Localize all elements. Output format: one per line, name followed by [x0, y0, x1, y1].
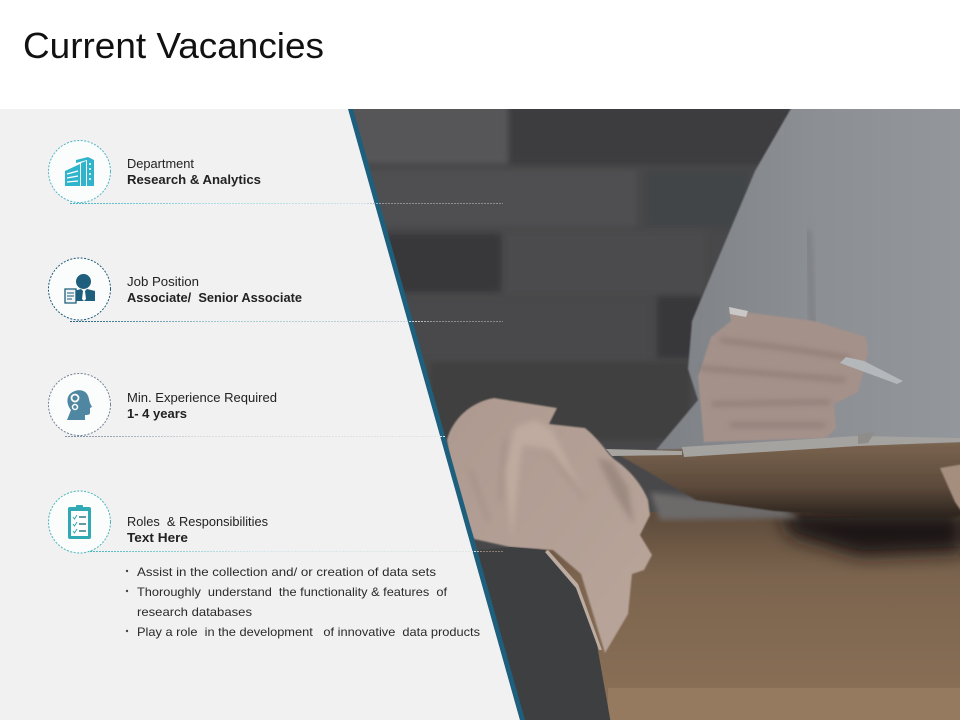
text: experience: Min. Experience Required	[127, 391, 277, 405]
clasped hands	[447, 398, 652, 653]
writing hand	[698, 307, 903, 442]
icon: job position person	[48, 258, 110, 320]
bullet list: responsibilities: Assist in the collection and/ or creation of data sets	[137, 565, 436, 579]
divider: department	[70, 202, 503, 204]
divider: job position	[70, 320, 503, 322]
table	[540, 512, 960, 720]
divider: experience	[65, 436, 445, 438]
text: job position: Associate/ Senior Associate	[127, 291, 302, 305]
panel: left background	[0, 109, 520, 720]
text: job position	[127, 275, 302, 305]
text: experience	[127, 391, 277, 421]
bullet list: responsibilities	[126, 565, 480, 639]
shirt	[656, 105, 960, 450]
icon: roles clipboard	[48, 491, 110, 553]
text: job position: Job Position	[127, 275, 199, 289]
panel edge stripe	[348, 109, 525, 720]
text: department	[127, 157, 261, 187]
text: roles: Text Here	[127, 531, 188, 545]
bullet list: responsibilities: Thoroughly understand the functionality & features of	[137, 585, 448, 599]
divider: roles	[90, 550, 503, 552]
text: department: Research & Analytics	[127, 173, 261, 187]
title: Current Vacancies	[23, 25, 324, 66]
bullet list: responsibilities: Play a role in the development of innovative data products	[137, 625, 480, 639]
photo: interview at a desk	[340, 105, 960, 720]
text: roles: Roles & Responsibilities	[127, 515, 268, 529]
clipboard	[606, 432, 960, 516]
text: department: Department	[127, 157, 195, 171]
icon: department building	[48, 140, 110, 202]
text: roles	[127, 515, 268, 545]
icon: experience head with gears	[48, 374, 110, 436]
jacket sleeve	[478, 547, 611, 720]
bullet list: responsibilities: research databases	[137, 605, 252, 619]
text: experience: 1- 4 years	[127, 407, 187, 421]
